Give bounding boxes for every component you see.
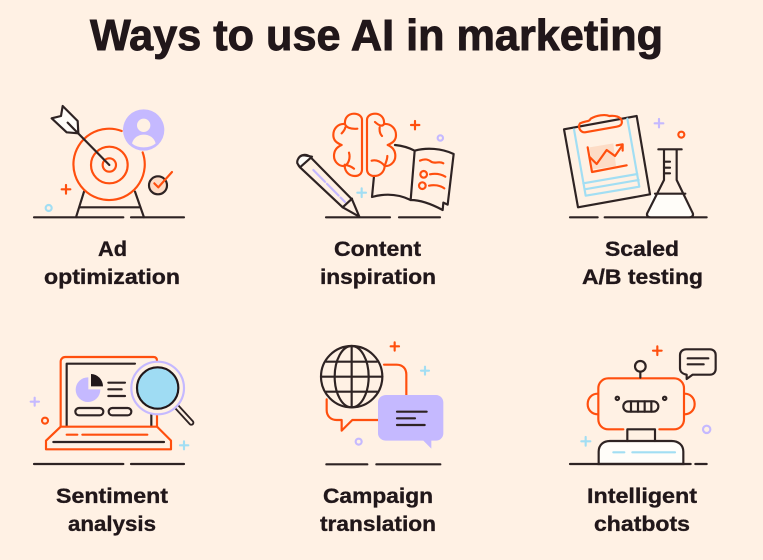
label: sentiment analysis: Sentiment xyxy=(56,485,168,508)
icon: target with arrow xyxy=(34,106,184,217)
panel: content inspiration xyxy=(297,114,454,289)
label: scaled A/B testing: Scaled xyxy=(605,238,679,261)
panel: intelligent chatbots xyxy=(570,346,716,536)
panel: campaign translation xyxy=(320,342,443,536)
label: campaign translation xyxy=(320,485,436,536)
label: ad optimization xyxy=(44,238,180,289)
label: ad optimization: Ad xyxy=(98,238,127,261)
label: scaled A/B testing: A/B testing xyxy=(582,266,703,289)
icon: brain, pencil and book xyxy=(297,114,454,217)
label: content inspiration: Content xyxy=(334,238,421,261)
label: intelligent chatbots xyxy=(587,485,697,536)
panel: ad optimization xyxy=(34,106,184,289)
label: content inspiration xyxy=(320,238,436,289)
label: scaled A/B testing xyxy=(582,238,703,289)
label: intelligent chatbots: Intelligent xyxy=(587,485,697,508)
icon: robot xyxy=(570,346,716,464)
label: sentiment analysis: analysis xyxy=(68,513,156,536)
panel: sentiment analysis xyxy=(31,357,191,536)
icon: globe and speech bubbles xyxy=(321,342,443,464)
label: content inspiration: inspiration xyxy=(320,266,436,289)
label: campaign translation: translation xyxy=(320,513,436,536)
title: Ways to use AI in marketing xyxy=(90,11,663,60)
panel: scaled A/B testing xyxy=(564,115,707,289)
label: intelligent chatbots: chatbots xyxy=(594,513,690,536)
label: campaign translation: Campaign xyxy=(323,485,433,508)
icon: clipboard and flask xyxy=(564,115,707,217)
label: sentiment analysis xyxy=(56,485,168,536)
label: ad optimization: optimization xyxy=(44,266,180,289)
icon: laptop and magnifier xyxy=(31,357,191,464)
